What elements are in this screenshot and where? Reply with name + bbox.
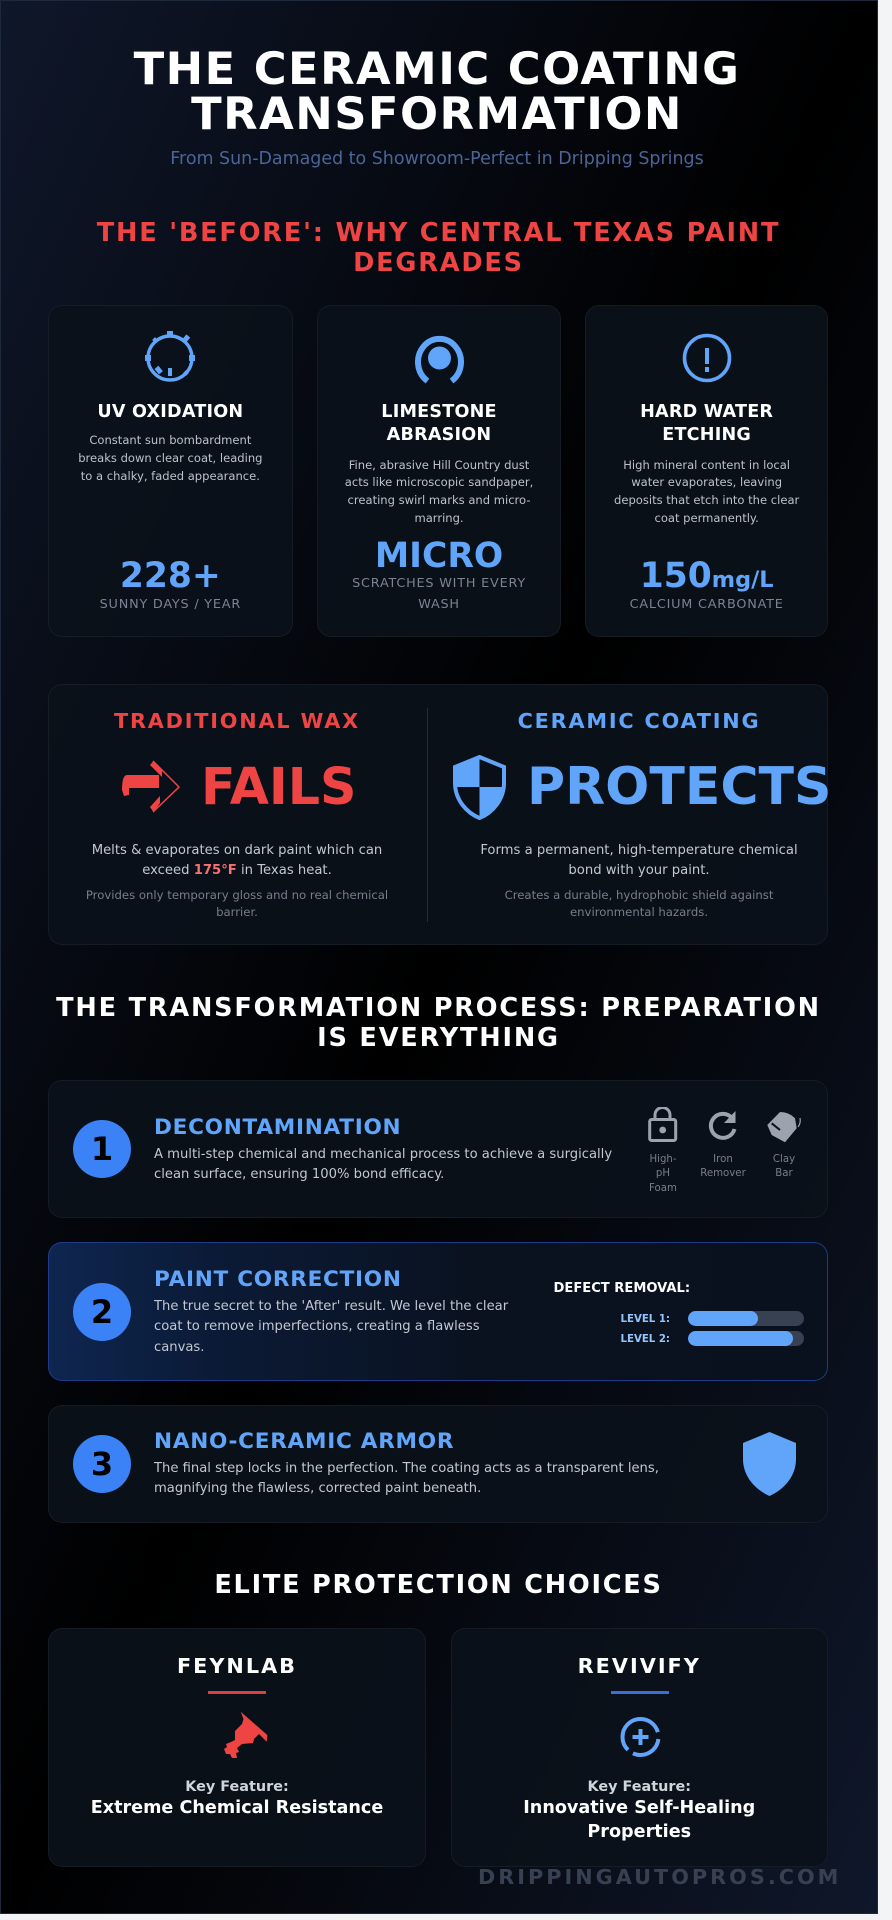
card description: Fine, abrasive Hill Country dust [349, 458, 529, 472]
label: high-pH foam: High- [649, 1154, 677, 1165]
title [134, 42, 740, 140]
heading: before section: THE 'BEFORE': WHY CENTRAL TEXAS PAINT [97, 218, 780, 248]
ceramic small text [505, 888, 774, 919]
card description: water evaporates, leaving [631, 475, 782, 489]
card title: ETCHING [662, 425, 751, 445]
panel: UV oxidation card [48, 305, 293, 637]
panel: hard water etching card [585, 305, 828, 637]
heading: traditional wax: TRADITIONAL WAX [114, 709, 360, 733]
card description: acts like microscopic sandpaper, [345, 475, 533, 489]
heading: transformation process: IS EVERYTHING [317, 1022, 560, 1052]
step description [154, 1461, 659, 1496]
divider [427, 708, 428, 922]
card title [640, 402, 773, 445]
heading: before section: DEGRADES [353, 248, 524, 278]
card title: ABRASION [387, 425, 491, 445]
wax small text: barrier. [216, 905, 258, 919]
level 1 bar [688, 1311, 804, 1326]
step description: magnifying the flawless, corrected paint beneath. [154, 1481, 481, 1496]
heading: transformation process [56, 992, 821, 1052]
icon: refresh [708, 1111, 736, 1140]
step number [73, 1283, 131, 1341]
icon: clay bar [767, 1112, 801, 1142]
wax small text: Provides only temporary gloss and no real chemical [86, 888, 388, 902]
card description: coat permanently. [654, 511, 759, 525]
ceramic small text: Creates a durable, hydrophobic shield against [505, 888, 773, 902]
key feature value: Innovative Self-Healing [523, 1798, 755, 1818]
heading: defect removal: DEFECT REMOVAL: [554, 1281, 690, 1296]
icon: halved shield [453, 755, 506, 820]
card title: LIMESTONE [381, 402, 497, 422]
panel: Revivify [450, 1628, 828, 1867]
title: TRANSFORMATION [191, 87, 683, 140]
card description [345, 458, 533, 525]
label: high-pH foam [649, 1154, 677, 1194]
icon: dust ring [414, 336, 464, 384]
card description: High mineral content in local [623, 458, 790, 472]
step number: 2 [91, 1293, 113, 1331]
card description: breaks down clear coat, leading [78, 451, 262, 465]
level 1 label: LEVEL 1: [620, 1314, 670, 1324]
title: THE CERAMIC COATING [134, 42, 740, 95]
stat label: SCRATCHES WITH EVERY [352, 576, 526, 591]
card description: Constant sun bombardment [89, 433, 251, 447]
step description: A multi-step chemical and mechanical process to achieve a surgically [154, 1147, 612, 1162]
step number [73, 1435, 131, 1493]
step title: NANO-CERAMIC ARMOR [154, 1429, 454, 1454]
stat label: SUNNY DAYS / YEAR [100, 596, 241, 612]
subtitle: From Sun-Damaged to Showroom-Perfect in Dripping Springs [170, 149, 704, 169]
stat label: CALCIUM CARBONATE [630, 596, 784, 612]
step description: clean surface, ensuring 100% bond efficacy. [154, 1167, 444, 1182]
brand name: REVIVIFY [578, 1654, 701, 1678]
panel: step 1 decontamination [48, 1080, 828, 1218]
icon: alert circle [682, 334, 732, 382]
stat value: MICRO [375, 536, 503, 576]
step description [154, 1299, 508, 1355]
accent bar [610, 1690, 668, 1694]
wax main text: Melts & evaporates on dark paint which can [92, 843, 382, 858]
step description: canvas. [154, 1340, 204, 1355]
ceramic small text: environmental hazards. [570, 905, 708, 919]
label: high-pH foam: pH [656, 1168, 670, 1179]
label: clay bar: Clay [773, 1154, 795, 1165]
level 2 bar [688, 1331, 804, 1346]
card description [614, 458, 800, 525]
big word: fails: FAILS [201, 756, 356, 816]
label: iron remover: Remover [700, 1168, 746, 1179]
label: clay bar [773, 1154, 795, 1179]
ceramic main text [480, 843, 798, 878]
step description: The true secret to the 'After' result. We level the clear [154, 1299, 508, 1314]
heading: ceramic coating: CERAMIC COATING [518, 709, 760, 733]
watermark: DRIPPINGAUTOPROS.COM [478, 1865, 841, 1889]
key feature value: Extreme Chemical Resistance [91, 1798, 383, 1818]
heading: elite protection choices: ELITE PROTECTION CHOICES [214, 1570, 663, 1600]
icon: solid shield [743, 1432, 796, 1496]
card description: marring. [414, 511, 464, 525]
stat value: 150mg/L [640, 556, 774, 596]
panel: step 3 nano-ceramic armor [48, 1405, 828, 1522]
key feature value: Properties [587, 1822, 691, 1842]
label: iron remover: Iron [713, 1154, 733, 1165]
icon: sun [145, 331, 195, 382]
icon: self-healing plus [620, 1717, 660, 1757]
step description [154, 1147, 612, 1182]
step number: 3 [91, 1445, 113, 1483]
ceramic main text: bond with your paint. [568, 863, 710, 878]
wax main text: exceed 175°F in Texas heat. [142, 863, 332, 878]
card title: UV OXIDATION [97, 402, 243, 422]
card title: HARD WATER [640, 402, 773, 422]
heading: before section [96, 218, 780, 278]
label: clay bar: Bar [775, 1168, 793, 1179]
panel: limestone abrasion card [317, 305, 561, 637]
big word: protects: PROTECTS [527, 756, 831, 816]
step description: coat to remove imperfections, creating a flawless [154, 1319, 480, 1334]
ceramic main text: Forms a permanent, high-temperature chemical [480, 843, 798, 858]
key feature label: Key Feature: [185, 1778, 289, 1794]
panel: wax versus ceramic comparison [48, 684, 828, 945]
card description: creating swirl marks and micro- [348, 493, 530, 507]
step title: PAINT CORRECTION [154, 1267, 402, 1292]
wax main text [92, 843, 382, 878]
wax small text [86, 888, 388, 919]
panel: Feynlab [48, 1628, 426, 1867]
card description [78, 433, 262, 483]
step title: DECONTAMINATION [154, 1115, 401, 1140]
stat value: 228+ [120, 556, 221, 596]
key feature value [523, 1798, 755, 1842]
card description: deposits that etch into the clear [614, 493, 799, 507]
accent bar [208, 1690, 266, 1694]
card description: to a chalky, faded appearance. [81, 469, 260, 483]
key feature label: Key Feature: [587, 1778, 691, 1794]
brand name: FEYNLAB [177, 1654, 297, 1678]
stat label: WASH [418, 596, 460, 612]
step description: The final step locks in the perfection. The coating acts as a transparent lens, [154, 1461, 659, 1476]
step number: 1 [91, 1130, 113, 1168]
icon: hammer [224, 1712, 268, 1758]
stat label [352, 576, 526, 612]
label: high-pH foam: Foam [649, 1183, 677, 1194]
icon: lock [648, 1107, 678, 1142]
panel: step 2 paint correction [48, 1242, 828, 1381]
heading: transformation process: THE TRANSFORMATION PROCESS: PREPARATION [56, 992, 821, 1022]
icon: broken arrow [122, 760, 180, 812]
card title [381, 402, 497, 445]
level 2 label: LEVEL 2: [620, 1334, 670, 1344]
step number [73, 1120, 131, 1178]
label: iron remover [700, 1154, 746, 1179]
